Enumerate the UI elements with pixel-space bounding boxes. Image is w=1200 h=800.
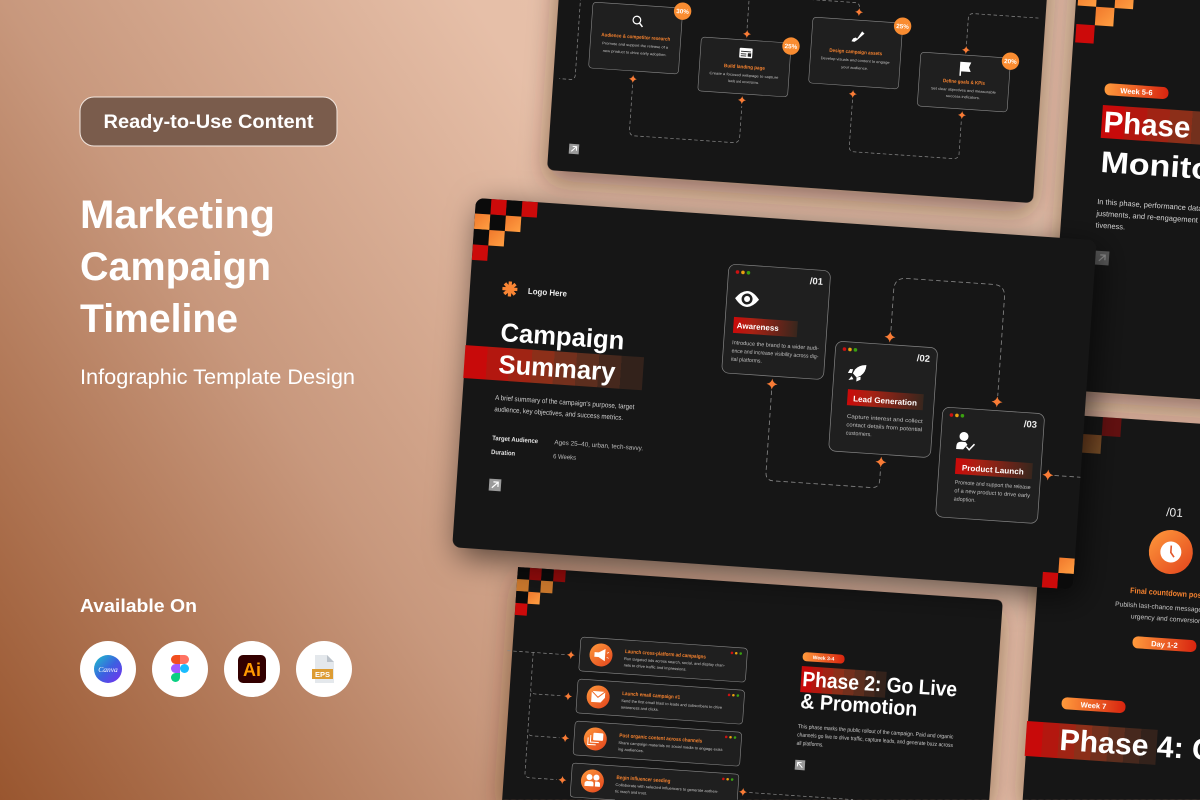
details table: Duration: [491, 449, 515, 458]
text: phase description: channels go live to drive traffic, capture leads, and generate buzz across: [797, 732, 953, 749]
heading: phase 3 monitoring: [1099, 106, 1200, 191]
card: audience research 30%: [589, 0, 692, 75]
heading: campaign summary: Summary: [498, 349, 617, 387]
heading band: [463, 345, 644, 390]
heading: phase 3 monitoring: Phase: [1103, 106, 1192, 145]
checker decoration: [1082, 416, 1122, 455]
connector lines: [499, 651, 861, 800]
badge: ready-to-use content: [80, 97, 337, 146]
badge: ready-to-use content: Ready-to-Use Content: [104, 112, 314, 133]
card: ad campaigns: Run targeted ads across search, social, and display chan-: [624, 657, 726, 668]
card: product launch: Product Launch: [962, 463, 1024, 477]
card: landing page 25%: Build landing page: [724, 63, 765, 72]
pill: week 5-6: Week 5-6: [1120, 86, 1153, 97]
card: audience research 30%: 30%: [676, 8, 689, 16]
card: campaign assets 25%: Design campaign assets: [829, 48, 883, 57]
icon: canva: Canva: [98, 665, 118, 674]
card: organic content: ing audiences.: [618, 747, 644, 753]
text: description: A brief summary of the campaign's purpose, target: [495, 395, 635, 411]
card: influencer seeding: [570, 763, 739, 800]
details table: Target Audience: [492, 435, 539, 445]
card: influencer seeding: tic reach and trust.: [615, 789, 647, 796]
card: campaign assets 25%: 25%: [896, 23, 909, 31]
icon: canva: [80, 641, 136, 697]
icon: arrow: [489, 479, 501, 491]
panel: left marketing copy: [80, 97, 355, 697]
pill: week 3-4: [802, 652, 845, 664]
icon: clock: [1147, 529, 1194, 575]
subtitle: Infographic Template Design: [80, 366, 355, 389]
title: Timeline: [80, 297, 238, 341]
text: description: [1114, 601, 1200, 627]
pill: week 7: Week 7: [1080, 700, 1107, 711]
card: lead generation: Lead Generation: [853, 394, 917, 408]
card: email campaign: Launch email campaign #1: [622, 691, 680, 701]
card: influencer seeding: Begin influencer seeding: [616, 775, 671, 785]
text: phase description: [1094, 197, 1200, 240]
icon: eps file: EPS: [315, 670, 330, 679]
card: awareness: Awareness: [737, 321, 780, 333]
title: Marketing: [80, 193, 275, 237]
text: description: [494, 395, 635, 423]
card: lead generation: contact details from potential: [846, 422, 922, 433]
card: audience research 30%: new product to drive early adoption.: [603, 49, 667, 57]
card: lead generation: customers.: [846, 431, 872, 438]
card: awareness: [722, 264, 831, 380]
icon: figma: [152, 641, 208, 697]
heading: phase 2 go live and promotion: [800, 668, 958, 724]
text: phase description: all platforms.: [796, 741, 824, 749]
card: audience research 30%: Promote and support the release of a: [602, 41, 668, 50]
card: landing page 25%: [698, 31, 800, 98]
text: phase description: tiveness.: [1095, 221, 1125, 232]
card: landing page 25%: 25%: [784, 43, 798, 51]
card: lead generation: Capture interest and collect: [847, 414, 923, 425]
details table: Ages 25–40, urban, tech-savvy.: [554, 439, 644, 452]
card: organic content: Share campaign materials on social media to engage exist-: [618, 741, 724, 752]
title: Campaign: [80, 245, 271, 289]
icon: arrow: [795, 760, 805, 770]
card: product launch: Promote and support the release: [955, 480, 1031, 491]
heading band: [800, 666, 887, 698]
card: product launch: /03: [1023, 419, 1037, 431]
card: goals and KPIs 20%: Set clear objectives and measurable: [931, 86, 996, 95]
card: campaign assets 25%: your audience.: [841, 65, 868, 71]
checker decoration bottom right: [1042, 556, 1075, 589]
heading band: [1101, 105, 1200, 150]
heading: phase 2 go live and promotion: Phase 2: Go Live: [802, 668, 958, 702]
card: goals and KPIs 20%: 20%: [1004, 58, 1017, 66]
slide: right bottom, phase 4: [1022, 413, 1200, 800]
pill: week 7: [1061, 697, 1126, 713]
pill: week 5-6: [1104, 83, 1169, 99]
text: phase description: This phase marks the public rollout of the campaign. Paid and organic: [798, 724, 954, 741]
card: product launch: [935, 407, 1045, 524]
icon: arrow: [1095, 251, 1109, 265]
title: [80, 193, 275, 341]
pill: day 1-2: [1132, 636, 1197, 652]
card: email campaign: [576, 679, 745, 724]
slide: main, campaign summary: [452, 198, 1097, 589]
heading: campaign summary: [497, 317, 625, 387]
pill: day 1-2: Day 1-2: [1151, 639, 1178, 650]
card: email campaign: Send the first email blast to leads and subscribers to drive: [621, 699, 722, 710]
card: landing page 25%: Create a focused webpage to capture: [709, 71, 778, 80]
text: description: audience, key objectives, and success metrics.: [494, 406, 623, 422]
card: ad campaigns: Launch cross-platform ad campaigns: [625, 649, 706, 660]
sparkles: [558, 651, 756, 797]
card: email campaign: awareness and clicks.: [621, 705, 659, 712]
card: product launch: adoption.: [953, 496, 976, 504]
card: lead generation: /02: [916, 353, 930, 365]
icon: eps file: [296, 641, 352, 697]
pill: week 3-4: Week 3-4: [812, 655, 835, 663]
text: phase description: [796, 724, 954, 757]
checker decoration: [515, 567, 566, 618]
card: goals and KPIs 20%: Define goals & KPIs: [943, 78, 985, 87]
card: audience research 30%: Audience & competitor research: [601, 32, 670, 43]
logo: [502, 281, 568, 300]
sparkles: [628, 0, 973, 119]
details table: 6 Weeks: [553, 453, 577, 462]
card: product launch: of a new product to drive early: [954, 488, 1031, 499]
slide: bottom, phase 2: [497, 567, 1003, 800]
card: goals and KPIs 20%: [917, 46, 1020, 113]
checker decoration: [1075, 0, 1134, 46]
card: organic content: Post organic content across channels: [619, 733, 702, 745]
card: influencer seeding: Collaborate with selected influencers to generate authen-: [615, 783, 719, 794]
heading: phase 2 go live and promotion: & Promotion: [800, 690, 918, 721]
slide: top, goals breakdown: [547, 0, 1053, 203]
card: landing page 25%: leads and conversions.: [728, 79, 759, 85]
card: lead generation: [829, 341, 938, 458]
card: awareness: ital platforms.: [731, 357, 763, 365]
card: ad campaigns: nels to drive traffic and impressions.: [624, 663, 687, 672]
heading band: [1025, 721, 1158, 765]
step number: /01: [1166, 505, 1184, 520]
icon: adobe illustrator: Ai: [243, 660, 261, 680]
connector lines: [556, 0, 1039, 164]
logo: Logo Here: [528, 286, 568, 299]
slide: right top, phase 3: [1049, 0, 1200, 437]
card: awareness: Introduce the brand to a wider audi-: [732, 340, 819, 352]
connector lines: [765, 270, 1093, 502]
checker decoration: [472, 198, 538, 264]
card: campaign assets 25%: [809, 11, 912, 90]
heading: campaign summary: Campaign: [500, 317, 625, 355]
card: ad campaigns: [579, 637, 748, 682]
card: organic content: [573, 721, 742, 766]
card: awareness: ence and increase visibility across dig-: [731, 348, 819, 360]
heading: available on: Available On: [80, 596, 197, 616]
icon: adobe illustrator: [224, 641, 280, 697]
sparkles: [761, 323, 1062, 481]
card: campaign assets 25%: Develop visuals and content to engage: [821, 56, 890, 65]
details table: [491, 435, 644, 466]
card: goals and KPIs 20%: success indicators.: [946, 94, 980, 100]
card: awareness: /01: [809, 276, 824, 288]
icon: arrow: [569, 144, 579, 154]
